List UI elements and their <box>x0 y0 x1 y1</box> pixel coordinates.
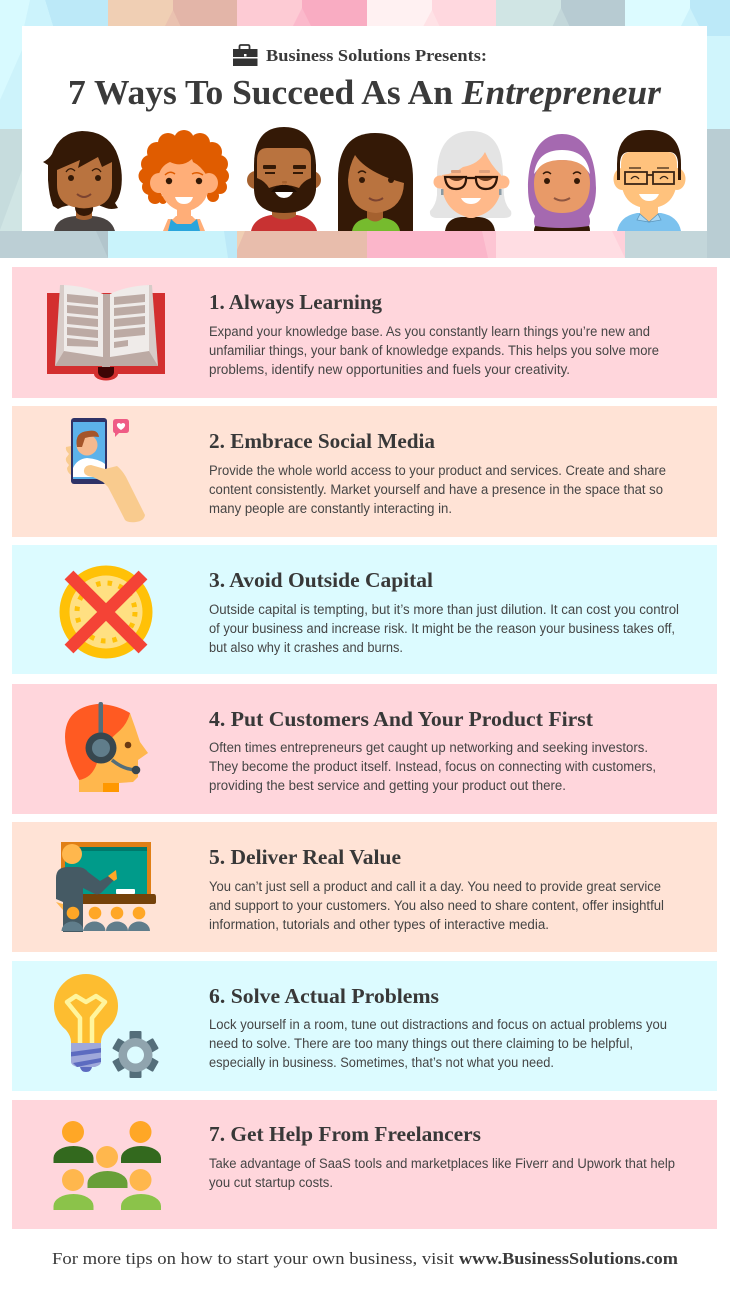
body text <box>209 324 659 377</box>
panel 4: customers and product first <box>12 684 717 814</box>
body text: need to solve. There are too many things out there claiming to be helpful, <box>209 1036 633 1051</box>
heading: 4. Put Customers And Your Product First <box>209 707 593 731</box>
panel 2: embrace social media <box>12 406 717 537</box>
body text <box>209 740 656 793</box>
panel 5: deliver real value <box>12 822 717 952</box>
face 2: red curly-haired woman <box>138 130 229 231</box>
body text: but also why it crashes and burns. <box>209 640 403 655</box>
heading: 2. Embrace Social Media <box>209 429 436 453</box>
icon: light bulb and gear <box>54 974 159 1078</box>
heading: 6. Solve Actual Problems <box>209 984 439 1008</box>
body text: content consistently. Market yourself and have a presence in the space that so <box>209 482 663 497</box>
panel 1: always learning <box>12 267 717 398</box>
footer call to action: www.BusinessSolutions.com <box>459 1249 678 1268</box>
heading: 3. Avoid Outside Capital <box>209 568 433 592</box>
panel 6: solve actual problems <box>12 961 717 1091</box>
body text: Often times entrepreneurs get caught up networking and seeking investors. <box>209 740 648 755</box>
icon: group of people <box>54 1121 161 1210</box>
icon: open book <box>47 285 165 380</box>
heading: 5. Deliver Real Value <box>209 845 401 869</box>
body text: problems, identify new opportunities and fuels your creativity. <box>209 362 570 377</box>
body text: information, tutorials and other types of interactive media. <box>209 917 549 932</box>
panel 3: avoid outside capital <box>12 545 717 674</box>
subtitle: Business Solutions Presents: <box>266 46 487 65</box>
body text: They become the product itself. Instead, focus on connecting with customers, <box>209 759 656 774</box>
body text: providing the best service and getting your product out there. <box>209 778 566 793</box>
body text <box>209 879 664 932</box>
face 4: long-haired woman <box>338 133 413 231</box>
body text: and support to your customers. You also need to share content, offer insightful <box>209 898 664 913</box>
body text <box>209 1156 675 1190</box>
body text: Take advantage of SaaS tools and marketplaces like Fiverr and Upwork that help <box>209 1156 675 1171</box>
icon: briefcase <box>233 45 258 66</box>
row of seven faces <box>43 127 686 231</box>
icon: crossed-out coin <box>60 566 152 658</box>
footer call to action: For more tips on how to start your own business, visit <box>52 1249 454 1268</box>
body text <box>209 463 666 516</box>
body text: Lock yourself in a room, tune out distractions and focus on actual problems you <box>209 1017 667 1032</box>
body text: especially in business. Sometimes, that’s not what you need. <box>209 1055 554 1070</box>
face 6: woman in purple hijab <box>528 134 596 231</box>
body text: Expand your knowledge base. As you constantly learn things you’re new and <box>209 324 650 339</box>
body text: you cut startup costs. <box>209 1175 333 1190</box>
face 1: dark-haired man <box>43 131 122 231</box>
icon: hand holding phone <box>66 418 145 522</box>
heading: 1. Always Learning <box>209 290 382 314</box>
icon: head with headset <box>65 702 148 792</box>
body text: of your business and increase risk. It might be the reason your business takes off, <box>209 621 675 636</box>
body text: You can’t just sell a product and call it a day. You need to provide great service <box>209 879 661 894</box>
face 7: man with glasses <box>614 130 686 231</box>
body text: Provide the whole world access to your product and services. Create and share <box>209 463 666 478</box>
body text: many people are constantly interacting in. <box>209 501 452 516</box>
header white panel <box>22 26 707 231</box>
header background mosaic <box>0 0 730 258</box>
body text <box>209 602 679 655</box>
title: 7 Ways To Succeed As An Entrepreneur <box>68 73 661 112</box>
body text <box>209 1017 667 1070</box>
heading: 7. Get Help From Freelancers <box>209 1122 481 1146</box>
body text: unfamiliar things, your bank of knowledge expands. This helps you solve more <box>209 343 659 358</box>
face 3: bearded man <box>247 127 321 231</box>
footer call to action <box>52 1249 678 1268</box>
face 5: older woman with glasses <box>430 131 511 231</box>
icon: teacher at blackboard <box>56 842 156 932</box>
body text: Outside capital is tempting, but it’s more than just dilution. It can cost you control <box>209 602 679 617</box>
panel 7: get help from freelancers <box>12 1100 717 1229</box>
